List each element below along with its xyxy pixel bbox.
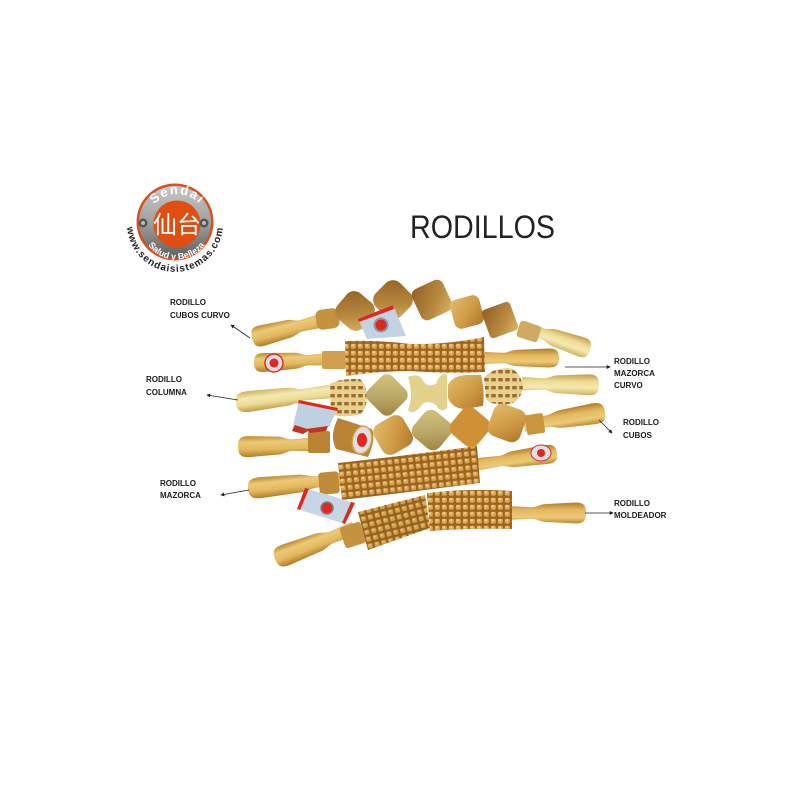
arrow: columna xyxy=(207,395,238,400)
label: rodillo cubos: CUBOS xyxy=(623,431,653,440)
label: rodillo mazorca curvo: RODILLO xyxy=(614,357,650,366)
cylinder label xyxy=(350,424,374,456)
label: rodillo cubos curvo: RODILLO xyxy=(170,298,206,307)
ribbed segment left xyxy=(358,495,430,550)
handle label xyxy=(265,354,283,372)
ribbed block right xyxy=(484,368,523,404)
logo disc xyxy=(136,184,214,260)
diamond xyxy=(363,371,411,419)
tag shadow xyxy=(306,426,328,433)
tag xyxy=(297,488,355,524)
logo: website arc text: www.sendaisistemas.com xyxy=(127,226,223,272)
roller: cubos xyxy=(238,401,607,458)
roller: mazorca curvo xyxy=(254,337,559,376)
label: rodillo columna: COLUMNA xyxy=(146,388,187,397)
ribbed segment right xyxy=(427,490,512,531)
roller: columna xyxy=(235,368,599,434)
ribbed block left xyxy=(330,379,367,416)
roller: cubos curvo xyxy=(249,276,593,359)
cylinder with label xyxy=(333,418,373,457)
logo: Sendai arc text: Sendai xyxy=(150,186,204,203)
tag xyxy=(358,305,406,339)
label: rodillo mazorca curvo: CURVO xyxy=(614,381,643,390)
ribbed body xyxy=(345,337,485,376)
label: rodillo cubos curvo: CUBOS CURVO xyxy=(170,311,230,320)
tag xyxy=(292,400,338,434)
arrow: cubos curvo xyxy=(231,325,250,338)
label: rodillo mazorca curvo: MAZORCA xyxy=(614,369,655,378)
ribbed body xyxy=(338,446,480,500)
arrow: mazorca curvo xyxy=(565,366,610,368)
logo: Sendai xyxy=(127,184,223,272)
arrow: moldeador xyxy=(585,512,613,514)
handle label xyxy=(531,445,551,461)
logo: Chinese characters: 仙台 xyxy=(153,212,201,239)
label: rodillo mazorca: MAZORCA xyxy=(160,491,201,500)
label: rodillo moldeador: MOLDEADOR xyxy=(614,511,667,520)
logo: slogan arc text: Salud y Belleza xyxy=(149,242,205,260)
cube xyxy=(448,375,484,409)
roller: moldeador xyxy=(271,488,586,569)
title: RODILLOS xyxy=(410,209,555,245)
label: rodillo mazorca: RODILLO xyxy=(160,479,196,488)
label: rodillo moldeador: RODILLO xyxy=(614,499,650,508)
spool xyxy=(408,374,447,412)
label: rodillo columna: RODILLO xyxy=(146,375,182,384)
label: rodillo cubos: RODILLO xyxy=(623,418,659,427)
arrow: cubos xyxy=(599,420,612,433)
roller: mazorca xyxy=(247,444,558,500)
arrow: mazorca xyxy=(221,490,249,495)
